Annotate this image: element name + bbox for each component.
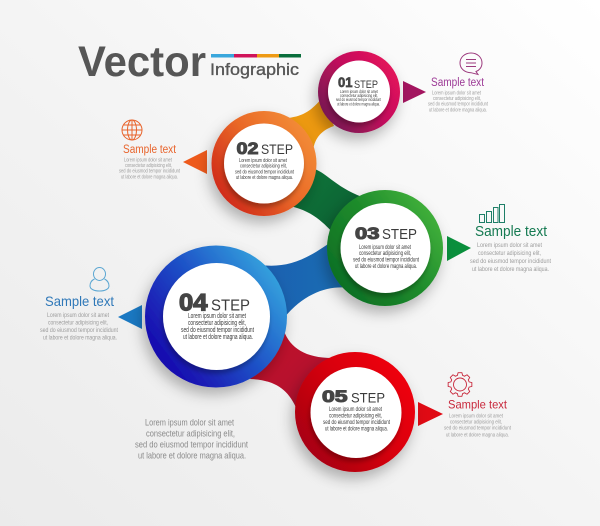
step 2 heading: STEP <box>261 141 293 157</box>
step 5 body <box>323 406 390 432</box>
bottom text block <box>135 418 248 461</box>
side body 4: consectetur adipisicing elit, <box>48 320 108 326</box>
side body 1: Lorem ipsum dolor sit amet <box>432 90 481 96</box>
step 3 heading <box>355 224 417 243</box>
panel: step 5 side text: Sample text <box>448 398 508 412</box>
panel: step 4 side text: Sample text <box>45 293 114 309</box>
panel: step 4 <box>118 246 287 388</box>
step 1 heading: STEP <box>354 79 378 91</box>
step 1 body: sed do eiusmod tempor incididunt <box>336 97 381 102</box>
panel: step 5 side text <box>444 373 511 438</box>
side body 3: ut labore et dolore magna aliqua. <box>472 266 549 273</box>
panel: step 3 side text: Sample text <box>475 224 547 240</box>
step 3 body: consectetur adipisicing elit, <box>359 250 411 257</box>
title: Infographic <box>210 61 299 79</box>
side body 1 <box>428 90 488 114</box>
bottom text block: sed do eiusmod tempor incididunt <box>135 440 248 450</box>
step 2 heading <box>236 139 293 158</box>
side body 1: sed do eiusmod tempor incididunt <box>428 102 488 108</box>
icon: globe <box>122 120 142 140</box>
side body 2: Lorem ipsum dolor sit amet <box>124 158 172 164</box>
bottom text block: consectetur adipisicing elit, <box>146 428 235 438</box>
panel: step 2 <box>183 111 316 216</box>
step 3 body: Lorem ipsum dolor sit amet <box>359 244 411 251</box>
side body 4: ut labore et dolore magna aliqua. <box>43 334 117 342</box>
step 5 body: sed do eiusmod tempor incididunt <box>323 419 390 426</box>
panel: step 2 side text <box>119 120 180 180</box>
triangle 4 <box>118 305 142 329</box>
step 2 body: sed do eiusmod tempor incididunt <box>235 169 294 175</box>
connector: blue step 3 to 4 <box>260 238 350 318</box>
step 2 body: consectetur adipisicing elit, <box>240 164 287 170</box>
connector: green step 2 to 3 <box>290 168 362 238</box>
panel: step 1 <box>318 51 426 133</box>
triangle 5 <box>418 402 443 426</box>
step 5 body: ut labore et dolore magna aliqua. <box>325 426 388 432</box>
side body 5: ut labore et dolore magna aliqua. <box>446 432 509 438</box>
step 4 heading <box>179 290 250 316</box>
step 3 body: sed do eiusmod tempor incididunt <box>353 256 419 264</box>
side body 2 <box>119 158 180 180</box>
side body 3: sed do eiusmod tempor incididunt <box>470 258 551 265</box>
step 3 body <box>353 244 419 270</box>
step 1 heading <box>338 74 378 91</box>
title <box>78 38 301 86</box>
step 2 heading: 02 <box>236 139 258 158</box>
step 4 body: Lorem ipsum dolor sit amet <box>188 313 246 320</box>
icon: chat bubble <box>460 53 482 74</box>
step 1 body: ut labore et dolore magna aliqua. <box>337 101 380 106</box>
icon: bar chart <box>480 204 504 222</box>
side body 4: sed do eiusmod tempor incididunt <box>40 327 118 334</box>
side body 5: sed do eiusmod tempor incididunt <box>444 426 511 432</box>
triangle 1 <box>403 81 426 103</box>
side body 5 <box>444 414 511 438</box>
step 1 body: Lorem ipsum dolor sit amet <box>340 89 378 94</box>
connector: red step 4 to 5 <box>250 331 332 412</box>
step 5 body: consectetur adipisicing elit, <box>329 412 382 420</box>
step 2 body: Lorem ipsum dolor sit amet <box>239 158 287 164</box>
connector: orange step 1 to 2 <box>288 98 334 152</box>
panel: step 1 side text: Sample text <box>431 77 485 89</box>
side body 3: Lorem ipsum dolor sit amet <box>477 242 542 249</box>
step 5 body: Lorem ipsum dolor sit amet <box>329 406 382 413</box>
panel: step 3 <box>327 190 471 306</box>
step 2 body <box>235 158 294 181</box>
side body 2: sed do eiusmod tempor incididunt <box>119 169 180 175</box>
panel: step 1 side text <box>428 53 488 114</box>
side body 2: ut labore et dolore magna aliqua. <box>121 174 178 180</box>
side body 4: Lorem ipsum dolor sit amet <box>47 312 109 319</box>
step 1 body <box>336 89 381 106</box>
icon: gear <box>448 373 472 396</box>
step 4 heading: 04 <box>179 290 208 316</box>
side body 3: consectetur adipisicing elit, <box>478 250 541 257</box>
side body 1: consectetur adipisicing elit, <box>433 96 481 102</box>
step 2 body: ut labore et dolore magna aliqua. <box>236 175 293 181</box>
panel: step 4 side text <box>40 268 118 342</box>
side body 4 <box>40 312 118 342</box>
bottom text block: Lorem ipsum dolor sit amet <box>145 418 234 428</box>
side body 5: Lorem ipsum dolor sit amet <box>449 414 503 420</box>
panel: step 2 side text: Sample text <box>123 144 177 156</box>
step 4 body <box>181 313 254 341</box>
step 4 body: consectetur adipisicing elit, <box>188 320 246 327</box>
title colour bar <box>211 54 301 58</box>
triangle 2 <box>183 150 207 174</box>
step 3 heading: 03 <box>355 224 380 243</box>
triangle 3 <box>447 236 471 261</box>
side body 2: consectetur adipisicing elit, <box>125 163 172 169</box>
side body 5: consectetur adipisicing elit, <box>450 420 502 426</box>
panel: step 3 side text <box>470 204 551 273</box>
bottom text block: ut labore et dolore magna aliqua. <box>138 451 246 461</box>
panel: step 5 <box>295 352 443 472</box>
icon: user <box>90 268 109 291</box>
step 3 body: ut labore et dolore magna aliqua. <box>355 263 417 270</box>
step 5 heading: 05 <box>322 387 348 406</box>
title: Vector <box>78 38 206 86</box>
step 4 body: ut labore et dolore magna aliqua. <box>183 334 253 341</box>
step 5 heading <box>322 387 385 406</box>
step 4 heading: STEP <box>211 298 250 314</box>
side body 3 <box>470 242 551 273</box>
step 3 heading: STEP <box>382 227 417 243</box>
step 4 body: sed do eiusmod tempor incididunt <box>181 327 254 334</box>
step 5 heading: STEP <box>351 390 385 406</box>
side body 1: ut labore et dolore magna aliqua. <box>429 108 487 114</box>
step 1 body: consectetur adipisicing elit, <box>340 93 378 98</box>
step 1 heading: 01 <box>338 74 353 90</box>
